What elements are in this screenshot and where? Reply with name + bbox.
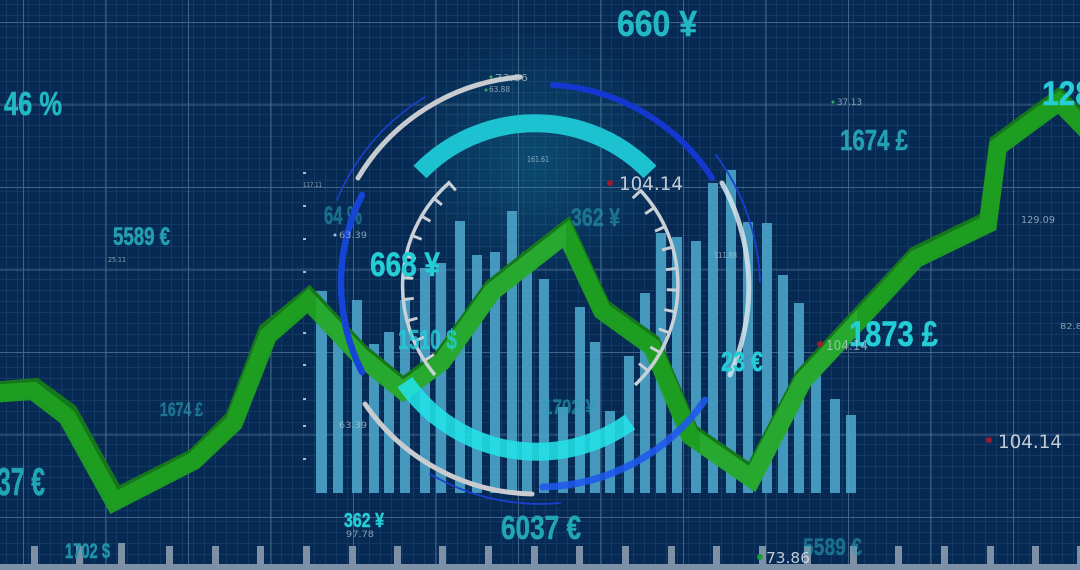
small numeric readouts: 104.14: [826, 339, 868, 354]
small numeric readouts: 97.78: [346, 530, 374, 540]
small numeric readouts: 37.13: [837, 98, 862, 108]
dim currency labels: 1674 £: [160, 400, 203, 421]
circular gauge: cyan arcs: [405, 123, 650, 452]
small numeric readouts: [108, 73, 1080, 567]
small numeric readouts: 63.39: [339, 421, 367, 431]
small numeric readouts: 104.14: [998, 431, 1062, 453]
dim currency labels: 5589 €: [803, 534, 862, 561]
small numeric readouts: 63.88: [489, 85, 510, 94]
bottom ruler: [0, 543, 1080, 570]
bright currency labels: 46 %: [4, 85, 62, 122]
dim currency labels: 64 %: [324, 202, 362, 230]
bright currency labels: 5589 €: [113, 223, 170, 251]
small numeric readouts: 25.11: [108, 256, 126, 264]
bright currency labels: 23 €: [721, 346, 763, 377]
readout marker dots: [334, 76, 992, 560]
bright currency labels: 668 ¥: [370, 246, 440, 284]
bar chart: [316, 170, 856, 493]
dim currency labels: [160, 202, 862, 561]
green line chart: [0, 98, 1080, 502]
circular gauge: outer rings: [337, 77, 760, 504]
bright currency labels: 362 ¥: [344, 510, 385, 532]
small numeric readouts: 73.86: [495, 73, 528, 84]
dim currency labels: 362 ¥: [571, 204, 620, 232]
small numeric readouts: 82.8: [1060, 322, 1080, 331]
small numeric readouts: 104.14: [619, 173, 683, 195]
small numeric readouts: 111.88: [714, 251, 737, 260]
bright currency labels: 1873 £: [849, 315, 938, 354]
bright currency labels: 1674 £: [840, 125, 908, 157]
dim currency labels: 1702 ¥: [543, 396, 595, 419]
bright currency labels: 1702 $: [65, 540, 110, 563]
bright currency labels: 6037 €: [501, 509, 581, 546]
small numeric readouts: 73.86: [766, 549, 810, 567]
small numeric readouts: 117.11: [303, 181, 322, 189]
bright currency labels: 1510 $: [398, 324, 457, 355]
small numeric readouts: 129.09: [1021, 215, 1055, 226]
bright currency labels: 660 ¥: [617, 3, 697, 44]
small numeric readouts: 63.39: [339, 231, 367, 241]
y axis dots: [303, 172, 306, 460]
circular gauge: inner tick dial: [403, 182, 678, 385]
small numeric readouts: 161.61: [527, 155, 549, 164]
